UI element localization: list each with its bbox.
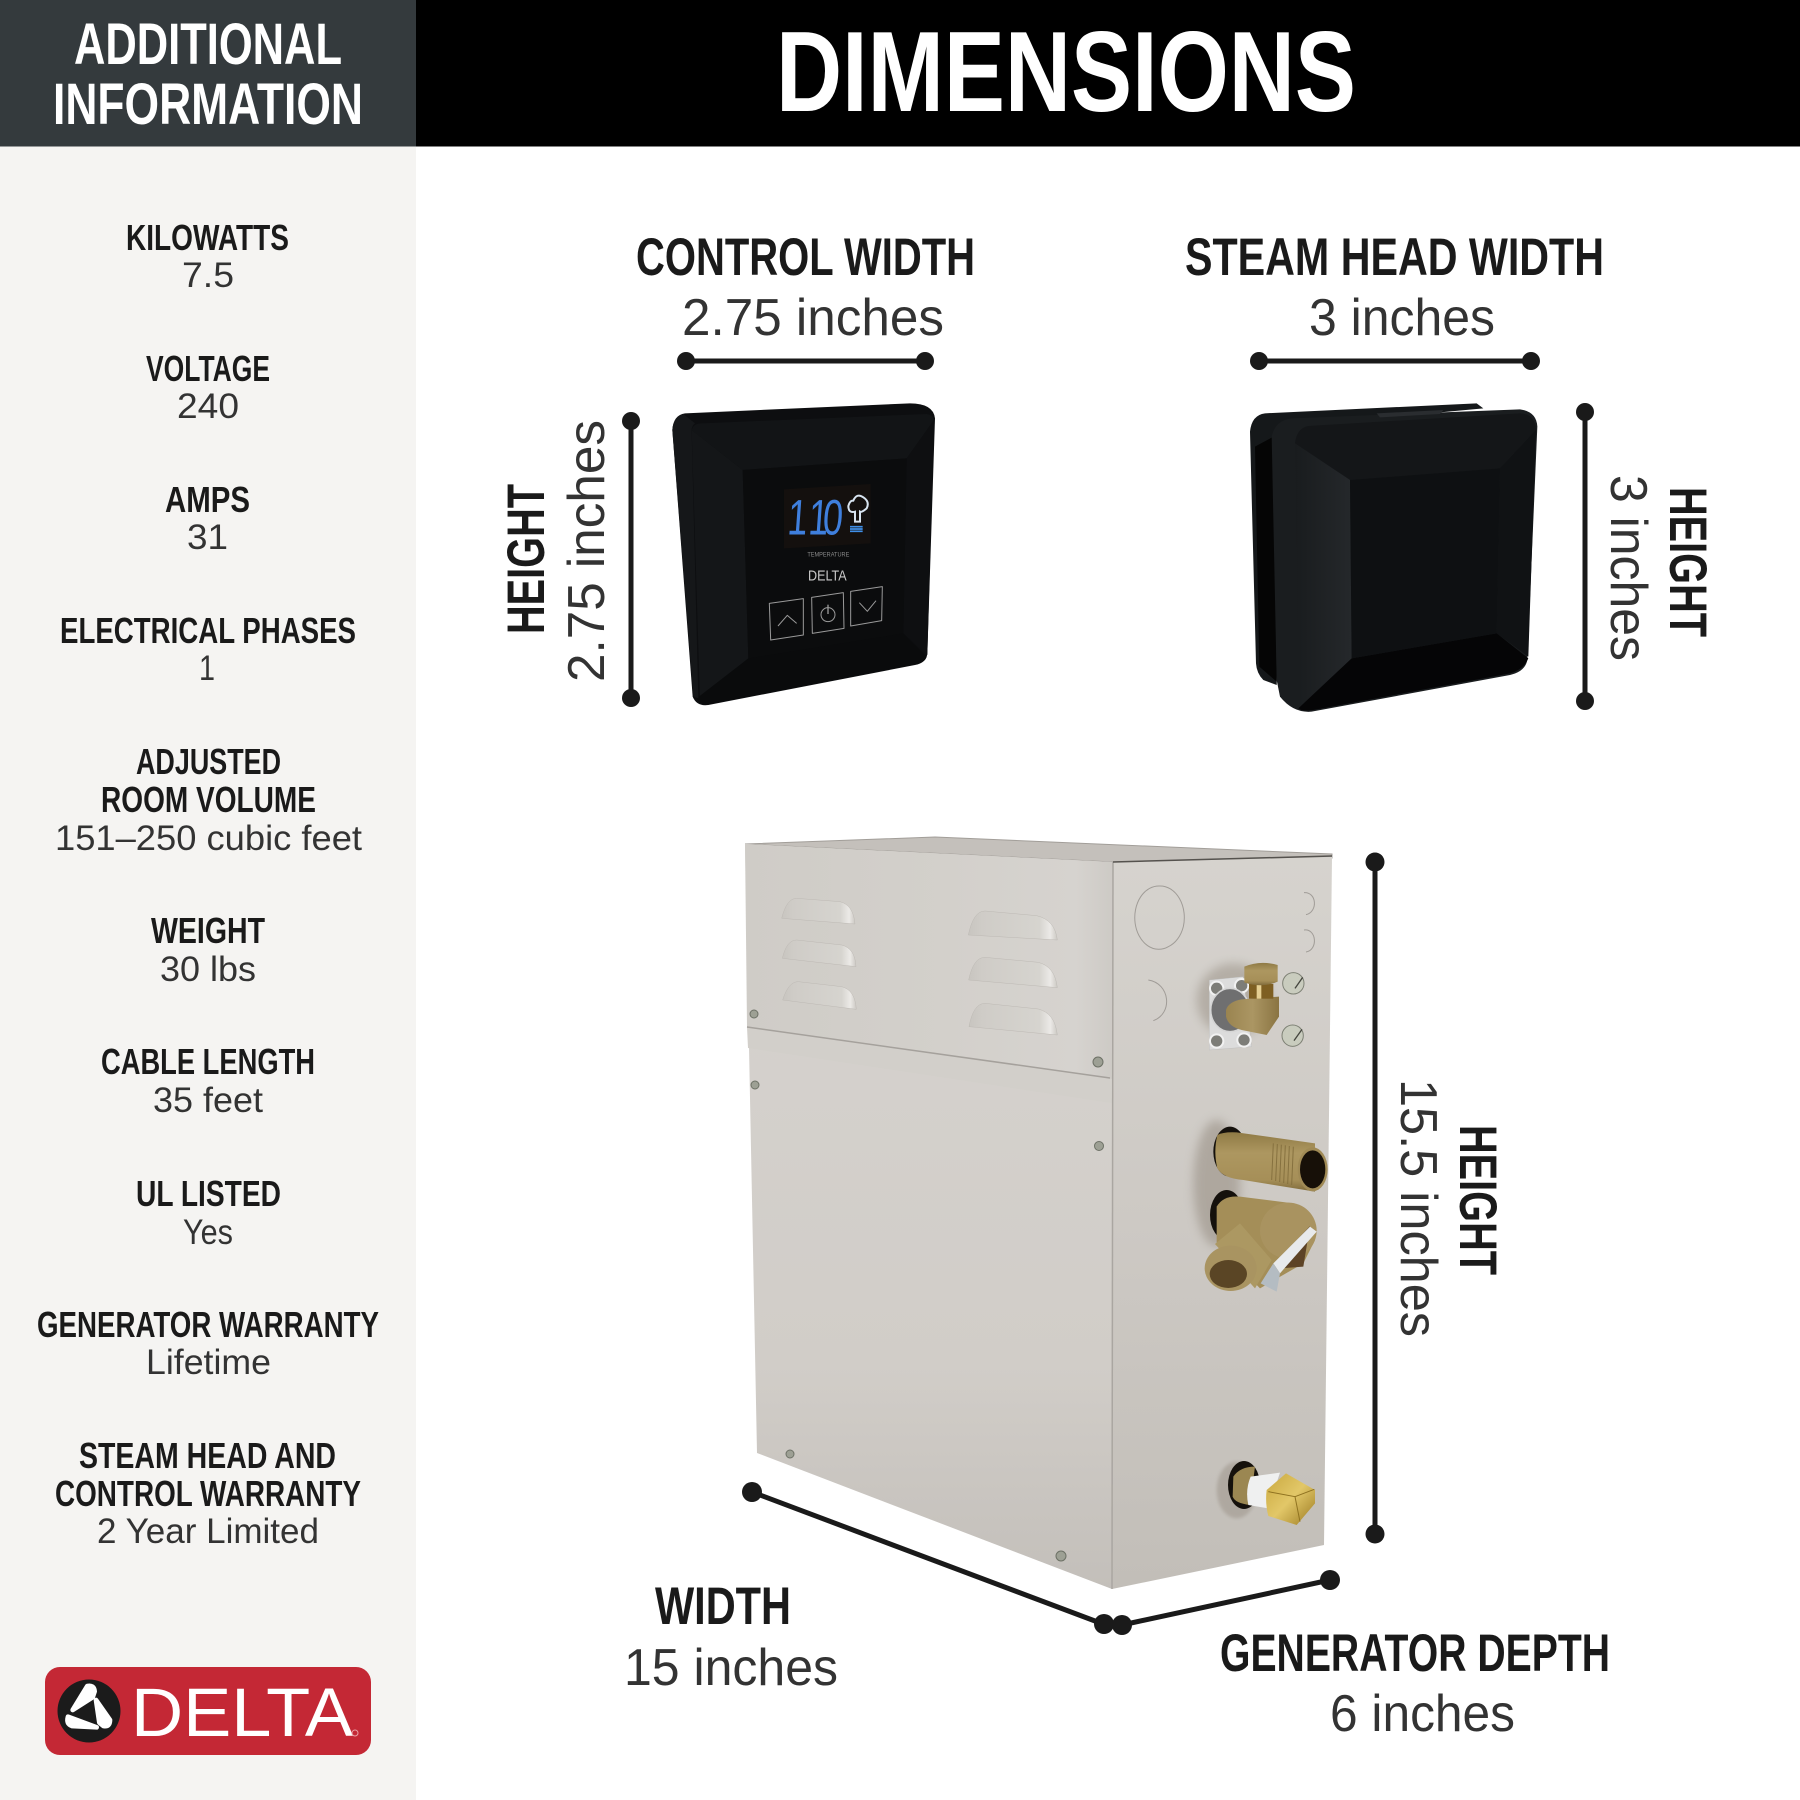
threaded pipe <box>1215 1132 1315 1192</box>
spec: cable length: 35 feet <box>153 1081 263 1120</box>
title: dimensions: DIMENSIONS <box>776 9 1356 136</box>
label: generator width: 15 inches <box>624 1639 838 1697</box>
heading line one: ADDITIONAL <box>74 12 342 77</box>
header bar: dimensions <box>416 0 1800 146</box>
spec: generator warranty: GENERATOR WARRANTY <box>37 1304 379 1345</box>
spec: kilowatts: 7.5 <box>182 256 234 295</box>
product: digital control <box>672 403 935 705</box>
label: steam head width: STEAM HEAD WIDTH <box>1185 228 1604 287</box>
generator panel lip <box>747 1027 1112 1103</box>
label: control height <box>497 420 616 682</box>
delta logo <box>45 1667 371 1755</box>
label: control width <box>636 228 975 347</box>
spec: generator warranty <box>37 1304 379 1382</box>
spec: adjusted room volume: ADJUSTED <box>136 741 281 782</box>
product: steam head <box>1250 403 1537 712</box>
spec: cable length: CABLE LENGTH <box>101 1041 315 1082</box>
spec: kilowatts: KILOWATTS <box>126 217 289 258</box>
label: steam head width <box>1185 228 1604 347</box>
generator upper panel <box>745 844 1113 1079</box>
label: control width: CONTROL WIDTH <box>636 228 975 287</box>
header panel: additional information <box>0 0 416 146</box>
label: generator height: 15.5 inches <box>1389 1079 1447 1337</box>
spec: electrical phases: 1 <box>199 649 215 688</box>
label: generator depth: 6 inches <box>1330 1685 1515 1743</box>
dimension line: generator depth <box>1112 1570 1340 1635</box>
valve body <box>1210 1190 1243 1240</box>
label: control height: 2.75 inches <box>558 420 616 682</box>
generator side panel <box>1112 857 1332 1589</box>
dimension line: generator width <box>742 1482 1114 1634</box>
label: steam head height: 3 inches <box>1599 475 1657 661</box>
sidebar background <box>0 0 416 1800</box>
dimension line: control height <box>622 412 640 707</box>
steam outlet with brass cap <box>1217 1461 1315 1525</box>
label: steam head height: HEIGHT <box>1658 487 1717 637</box>
water pipe and drain valve <box>1193 1120 1328 1292</box>
dimension line: steam head height <box>1576 403 1594 710</box>
dimension line: control width <box>677 352 934 370</box>
spec: weight: 30 lbs <box>160 950 256 989</box>
dimension line: steam head width <box>1250 352 1540 370</box>
spec: steam head and control warranty: 2 Year Limited <box>97 1512 319 1551</box>
label: generator height <box>1389 1079 1507 1337</box>
spec: electrical phases: ELECTRICAL PHASES <box>60 610 356 651</box>
spec: steam head and control warranty: CONTROL WARRANTY <box>55 1473 361 1514</box>
control bevels <box>672 414 934 704</box>
spec: ul listed <box>136 1173 281 1252</box>
label: steam head width: 3 inches <box>1309 289 1495 347</box>
label: generator height: HEIGHT <box>1448 1125 1507 1275</box>
temperature readout: 110 <box>786 491 845 546</box>
spec: electrical phases <box>60 610 356 688</box>
generator front panel <box>745 844 1113 1589</box>
label: generator width <box>624 1577 838 1697</box>
logo wordmark: DELTA <box>131 1674 353 1751</box>
dimension line: generator height <box>1366 852 1384 1544</box>
louvre vents <box>782 898 1057 1035</box>
spec: voltage: 240 <box>177 387 239 426</box>
spec: steam head and control warranty <box>55 1435 361 1551</box>
spec: generator warranty: Lifetime <box>146 1343 271 1382</box>
spec: steam head and control warranty: STEAM HEAD AND <box>79 1435 336 1476</box>
steam head bevels <box>1295 413 1536 711</box>
valve handle <box>1277 1226 1310 1268</box>
label: control height: HEIGHT <box>497 484 556 634</box>
control brand: DELTA <box>808 569 847 585</box>
spec: kilowatts <box>126 217 289 295</box>
label: control width: 2.75 inches <box>682 289 944 347</box>
product: steam generator <box>745 837 1332 1589</box>
generator top <box>745 837 1332 862</box>
knockouts and elbow fitting <box>1135 886 1314 1050</box>
spec: ul listed: UL LISTED <box>136 1173 281 1214</box>
spec: adjusted room volume: ROOM VOLUME <box>101 779 316 820</box>
steam icon <box>848 496 868 531</box>
spec: amps: 31 <box>187 518 228 557</box>
control screen <box>743 458 907 658</box>
panel screws <box>750 1010 1104 1561</box>
spec: voltage: VOLTAGE <box>146 348 270 389</box>
label: generator width: WIDTH <box>655 1577 791 1636</box>
spec list <box>37 217 379 1551</box>
control buttons <box>769 587 882 640</box>
heading line two: INFORMATION <box>53 72 363 137</box>
label: temperature: TEMPERATURE <box>807 552 849 559</box>
spec: amps: AMPS <box>165 479 250 520</box>
spec: adjusted room volume: 151–250 cubic feet <box>55 819 362 858</box>
spec: cable length <box>101 1041 315 1120</box>
label: steam head height <box>1599 475 1717 661</box>
spec: ul listed: Yes <box>183 1213 233 1252</box>
label: generator depth: GENERATOR DEPTH <box>1220 1624 1610 1683</box>
pipe rim <box>1213 1127 1247 1177</box>
spec: adjusted room volume <box>55 741 362 858</box>
logo symbol <box>67 1686 110 1727</box>
spec: voltage <box>146 348 270 426</box>
spec: weight <box>151 910 265 989</box>
spec: weight: WEIGHT <box>151 910 265 951</box>
spec: amps <box>165 479 250 557</box>
label: generator depth <box>1220 1624 1610 1743</box>
